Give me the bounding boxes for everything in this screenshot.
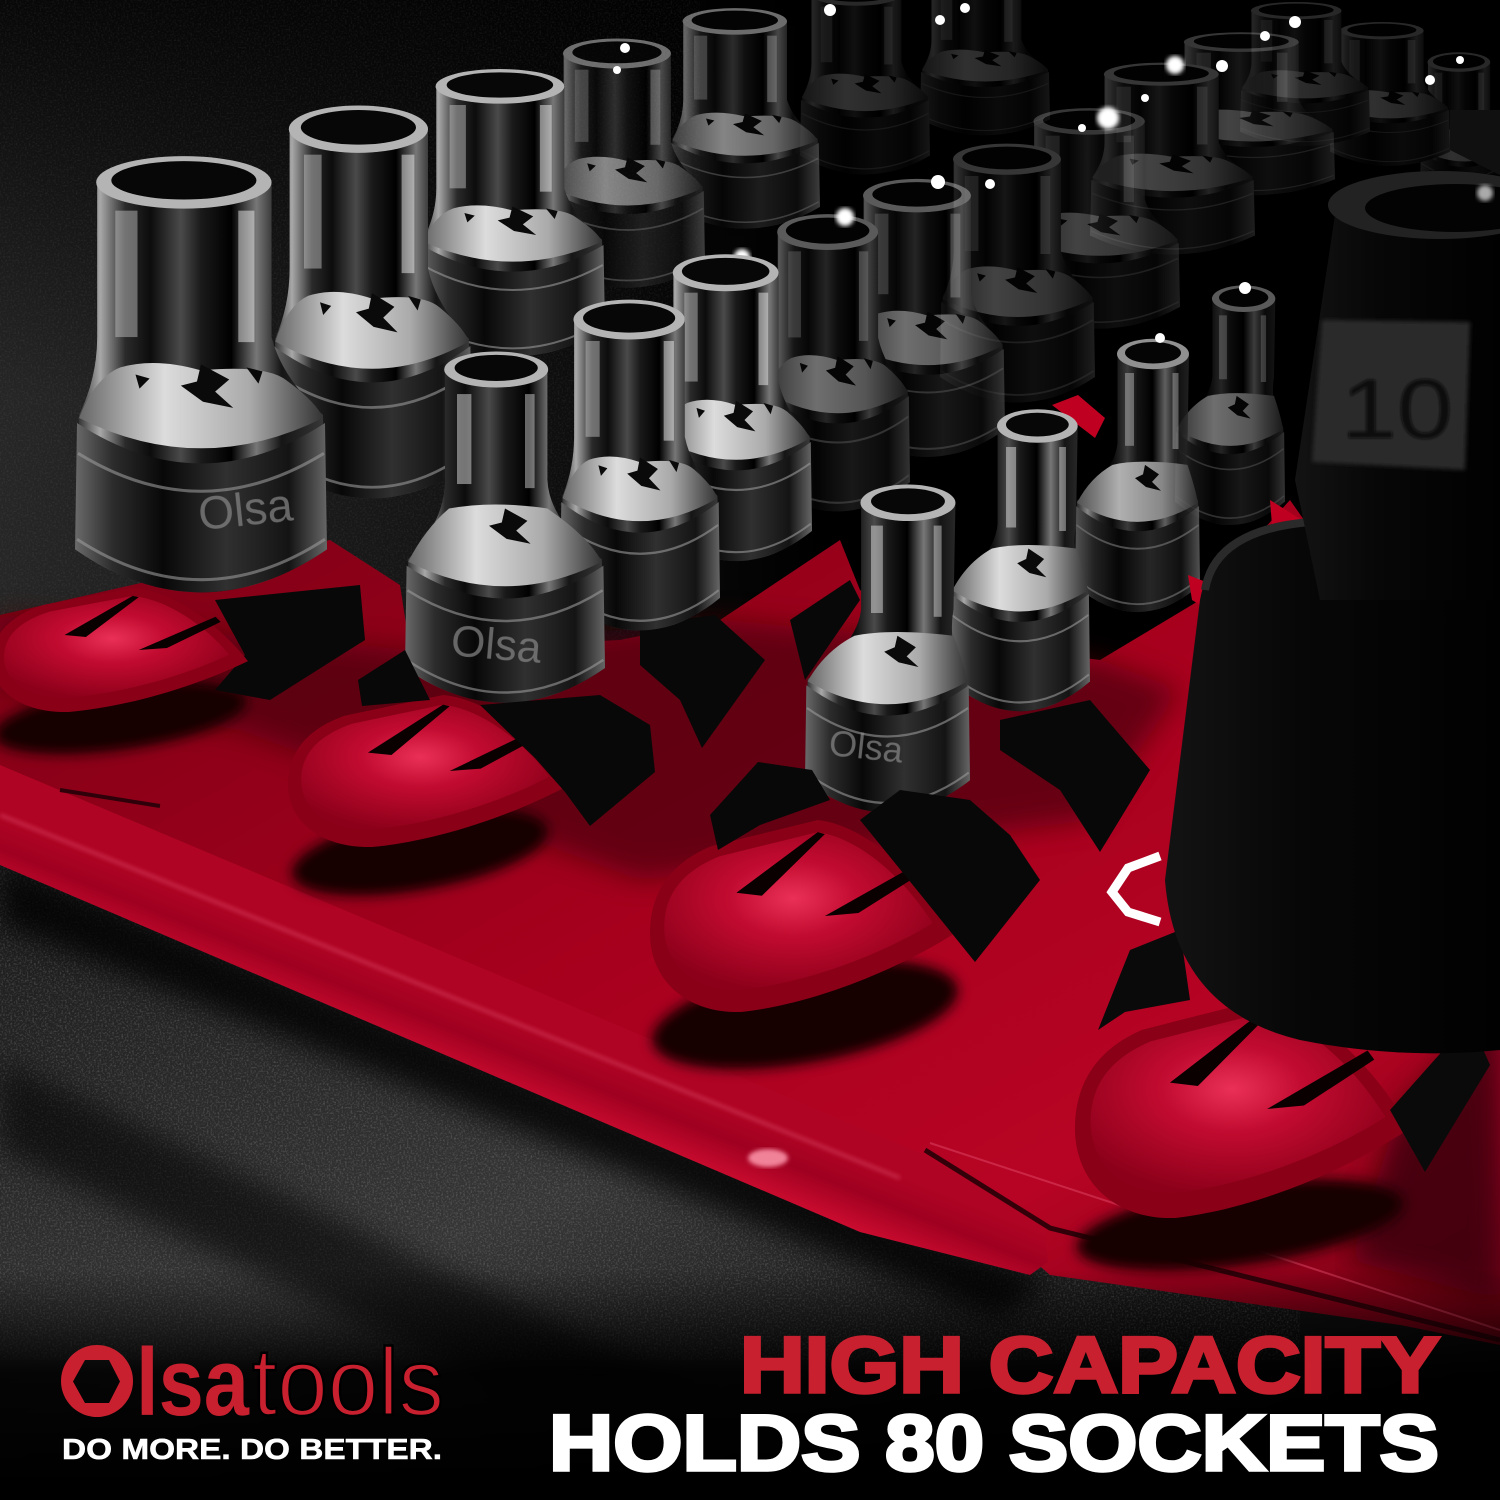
tray dark reflections xyxy=(0,615,1180,880)
red socket tray xyxy=(0,500,1500,1345)
second row sockets xyxy=(405,300,720,703)
tray notch xyxy=(925,1150,1500,1340)
brand marks on sockets xyxy=(196,478,906,771)
pad shadows xyxy=(0,668,1409,1288)
headline: HOLDS 80 SOCKETS xyxy=(549,1398,1439,1487)
tray highlights xyxy=(748,1149,788,1167)
black clip wings 2 xyxy=(358,650,655,826)
back black clips xyxy=(215,580,1150,852)
black clip wings 4 xyxy=(1098,930,1490,1172)
icon: hexagon O xyxy=(61,1345,133,1417)
headline: HIGH CAPACITY xyxy=(740,1320,1440,1409)
red slivers xyxy=(1052,395,1105,438)
tray front edge xyxy=(0,765,1048,1275)
logo xyxy=(61,1329,444,1436)
brand marks on sockets: Olsa xyxy=(449,616,544,673)
tray top surface xyxy=(0,500,1500,1345)
third-row far socket xyxy=(1175,285,1285,525)
bottom fade xyxy=(0,1270,1500,1500)
wordmark: lsa xyxy=(136,1329,250,1436)
brand marks on sockets: Olsa xyxy=(827,722,906,771)
small sockets row xyxy=(805,409,1090,812)
logo: tools xyxy=(252,1329,444,1436)
background: lower textured foam xyxy=(0,860,1500,1500)
back rows of sockets xyxy=(550,0,1500,612)
red pad 1 xyxy=(0,588,248,712)
bright glints on back row xyxy=(505,3,1464,343)
large black impact socket xyxy=(1165,110,1500,1053)
size label 10 xyxy=(1312,320,1470,470)
bokeh socket rows xyxy=(800,0,1500,215)
logo printed on tray xyxy=(1112,856,1160,922)
tagline: DO MORE. DO BETTER. xyxy=(62,1434,442,1466)
red pad 4 xyxy=(1075,1000,1410,1218)
front row sockets xyxy=(75,69,812,592)
black clip wings 3 xyxy=(710,762,1040,962)
size label 10: 10 xyxy=(1341,362,1453,456)
red pad 3 xyxy=(650,820,955,1012)
red pad 2 xyxy=(288,695,570,847)
background: upper dark mat xyxy=(0,0,1500,1000)
headline xyxy=(549,1320,1440,1487)
brand marks on sockets: Olsa xyxy=(196,478,296,540)
